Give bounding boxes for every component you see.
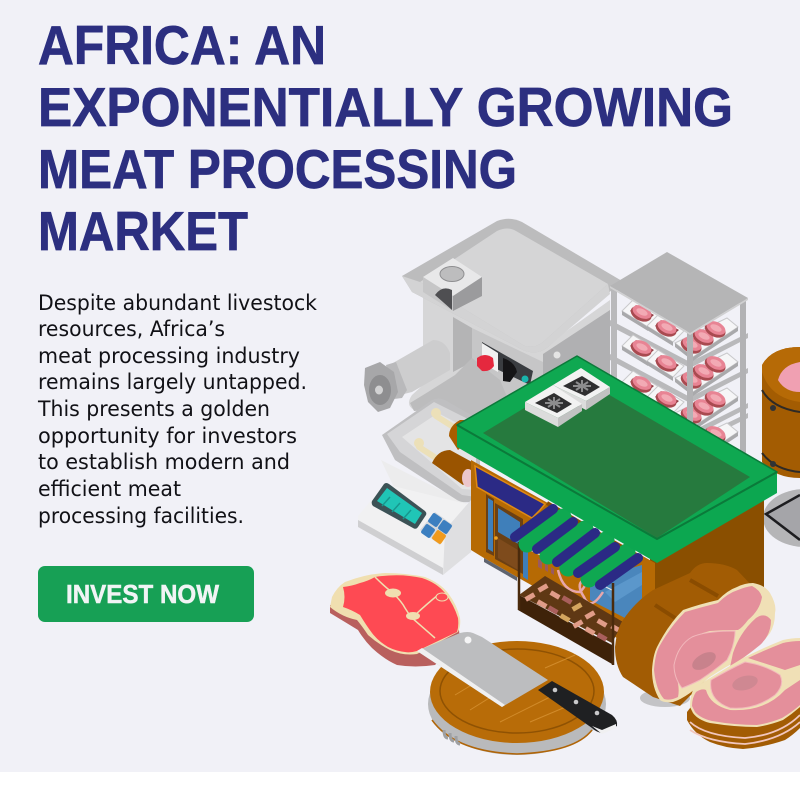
body text: to establish modern and: [38, 450, 290, 475]
rack trays, shelf 3: [622, 371, 738, 431]
title: MEAT PROCESSING: [38, 138, 517, 200]
awning trim: [547, 503, 640, 558]
roof inner: [483, 376, 750, 538]
button: invest now: INVEST NOW: [66, 579, 219, 609]
body text: resources, Africa’s: [38, 317, 225, 342]
scale keypad: [420, 512, 453, 545]
title: AFRICA: AN: [38, 14, 326, 76]
title: MARKET: [38, 200, 248, 262]
body text: remains largely untapped.: [38, 370, 307, 395]
body text: Despite abundant livestock: [38, 291, 318, 316]
hanging sausages: [558, 570, 603, 603]
slice ring: [711, 662, 782, 708]
illustration: scale platform and tray with bones: [381, 398, 480, 520]
ham pink centre: [674, 631, 735, 688]
ham pink outer: [654, 586, 762, 700]
illustration: meat rack: [610, 252, 748, 466]
shop window strip: [486, 494, 494, 556]
steak fat: [330, 573, 460, 654]
ham bone hole: [689, 648, 719, 674]
title: EXPONENTIALLY GROWING: [38, 76, 733, 138]
side bolt: [554, 352, 560, 358]
shop column: [642, 560, 654, 622]
hopper box: [423, 258, 482, 311]
sausage upper: [449, 420, 470, 450]
steak side: [330, 605, 460, 666]
steak veins: [375, 577, 438, 638]
illustration: grey pan at right: [763, 489, 800, 547]
grinder tray inner: [420, 228, 608, 347]
grinder collar: [386, 362, 407, 399]
rack rear posts and shelves: [610, 285, 748, 465]
display stall: [518, 576, 623, 664]
illustration: steak: [330, 573, 460, 666]
board hinge: [444, 730, 460, 744]
illustration: cutting board: [428, 641, 606, 755]
awning: [515, 509, 638, 585]
ham pink right: [730, 615, 771, 667]
roof left front face: [457, 425, 657, 563]
shop sign: [475, 466, 545, 518]
roast in tray: [432, 450, 472, 485]
rack top: [610, 252, 748, 333]
roof right front face: [657, 472, 777, 563]
illustration: weighing scale: [358, 483, 471, 575]
rack trays, shelf 2: [622, 335, 738, 396]
body text: opportunity for investors: [38, 424, 297, 449]
shop step: [484, 558, 517, 581]
blue strip right of door: [523, 540, 528, 580]
grinder tray rim: [402, 276, 610, 352]
rack tray, shelf 4: [675, 423, 738, 466]
ham shadow: [640, 689, 690, 707]
slice bone hole: [731, 673, 759, 693]
illustration: cleaver: [417, 632, 617, 734]
rack trays, shelf 1: [622, 300, 738, 361]
body text: processing facilities.: [38, 504, 244, 529]
roof vent left: [525, 385, 582, 427]
button: invest now: [38, 566, 254, 622]
tray floor: [402, 413, 476, 490]
slice pink: [692, 680, 800, 725]
body text: efficient meat: [38, 477, 181, 502]
grinder cylinder: [393, 340, 450, 395]
stall posts: [519, 542, 613, 665]
title: [38, 14, 733, 262]
illustration: ham slices: [687, 638, 800, 749]
body text: meat processing industry: [38, 344, 300, 369]
ham face cream: [652, 583, 775, 702]
grinder side panel: [543, 310, 610, 430]
shop window behind stall: [590, 565, 642, 618]
hanging string: [520, 545, 612, 590]
cleaver handle: [538, 681, 617, 733]
grinder body: [409, 295, 610, 440]
slice cream: [690, 638, 800, 727]
body text: [37, 291, 318, 529]
control panel: [477, 342, 533, 385]
illustration: butcher shop: [457, 356, 777, 665]
slices stack: [687, 690, 800, 749]
slice top right: [748, 641, 800, 670]
tray outer: [382, 398, 480, 502]
illustration: large ham: [615, 563, 775, 707]
illustration: barrel: [762, 347, 800, 478]
body text: This presents a golden: [37, 397, 270, 422]
platform: [381, 460, 470, 520]
cleaver blade: [417, 632, 548, 707]
roof vent right: [553, 368, 610, 410]
grinder plate: [364, 362, 398, 412]
steak red: [343, 575, 458, 652]
roof top face: [457, 356, 777, 539]
illustration: meat grinder: [364, 219, 622, 440]
shop door: [495, 503, 523, 574]
grinder front: [472, 312, 610, 440]
grinder dark band: [453, 317, 472, 372]
hanging tags: [538, 559, 554, 575]
shop side wall: [650, 492, 764, 640]
ham roast: [615, 563, 775, 706]
shop front wall: [471, 460, 655, 640]
rack front posts: [687, 297, 746, 457]
tray inner wall: [387, 402, 476, 497]
grinder top tray: [402, 219, 622, 352]
bone upper: [431, 408, 455, 428]
grinder base: [410, 358, 525, 440]
bone lower: [414, 438, 436, 458]
scale screen: [372, 483, 426, 529]
